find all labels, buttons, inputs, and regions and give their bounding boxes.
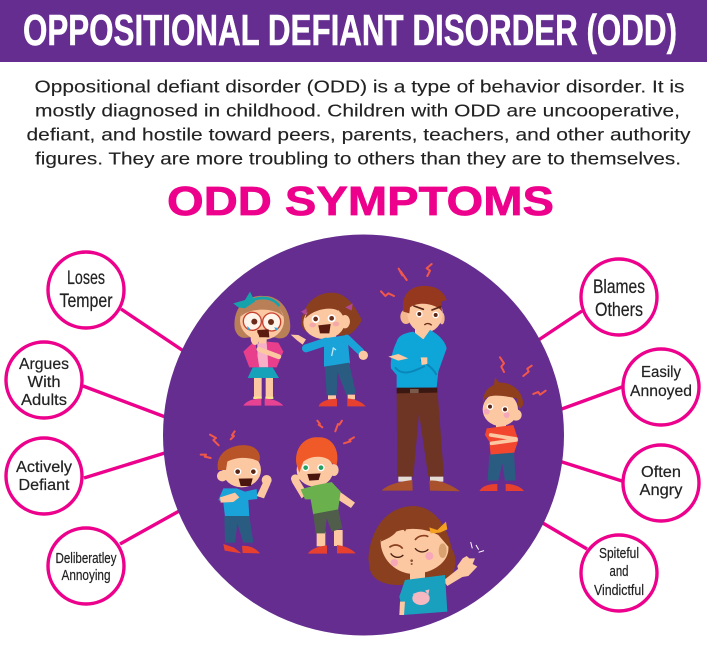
- illustration: girl with eyes closed and raised hand: [368, 506, 484, 615]
- illustration: crying girl with glasses: [233, 292, 290, 406]
- intro paragraph: defiant, and hostile toward peers, parents, teachers, and other authority: [26, 124, 691, 144]
- symptom: Spiteful and Vindictful: Vindictful: [594, 583, 644, 599]
- symptoms heading: ODD SYMPTOMS: [167, 178, 554, 224]
- symptom: Spiteful and Vindictful: and: [610, 564, 628, 580]
- symptom: Actively Defiant: Defiant: [18, 477, 70, 494]
- central purple circle: [163, 234, 564, 636]
- symptom: Argues With Adults: Argues: [19, 356, 69, 373]
- symptom: Easily Annoyed: Easily: [641, 364, 681, 381]
- symptom: Easily Annoyed: [623, 349, 699, 425]
- symptom: Loses Temper: [48, 252, 124, 328]
- header banner: [0, 0, 707, 62]
- symptom: Deliberatley Annoying: Annoying: [62, 568, 110, 584]
- symptom: Actively Defiant: [6, 438, 82, 514]
- connector lines: [83, 309, 622, 549]
- symptom: Often Angry: Often: [641, 464, 681, 481]
- symptom: Often Angry: Angry: [640, 482, 683, 499]
- symptom: Blames Others: Blames: [593, 277, 645, 298]
- symptom: Blames Others: Others: [595, 300, 643, 321]
- symptom: Deliberatley Annoying: [48, 528, 124, 604]
- illustration: shouting pointing girl: [291, 293, 368, 406]
- illustration: man with crossed arms: [381, 264, 460, 491]
- symptom: Spiteful and Vindictful: [581, 535, 657, 611]
- symptom: Loses Temper: Loses: [67, 268, 105, 289]
- symptom: Loses Temper: Temper: [60, 291, 113, 312]
- symptom: Actively Defiant: Actively: [16, 459, 72, 476]
- intro paragraph: [26, 76, 691, 168]
- symptom: Blames Others: [581, 259, 657, 335]
- symptom: Argues With Adults: With: [28, 374, 60, 391]
- illustration: shouting boy in blue: [201, 431, 272, 553]
- intro paragraph: Oppositional defiant disorder (ODD) is a type of behavior disorder. It is: [34, 76, 685, 96]
- symptom: Spiteful and Vindictful: Spiteful: [599, 546, 639, 562]
- symptom: Argues With Adults: Adults: [21, 392, 67, 409]
- illustration: angry boy with crossed arms: [479, 357, 546, 491]
- symptom: Easily Annoyed: Annoyed: [630, 383, 692, 400]
- intro paragraph: mostly diagnosed in childhood. Children with ODD are uncooperative,: [35, 100, 680, 120]
- symptom: Deliberatley Annoying: Deliberatley: [56, 551, 117, 567]
- intro paragraph: figures. They are more troubling to others than they are to themselves.: [35, 148, 681, 168]
- symptom: Often Angry: [623, 445, 699, 521]
- symptom: Argues With Adults: [6, 342, 82, 418]
- illustration: shouting red-haired boy in green: [291, 421, 356, 554]
